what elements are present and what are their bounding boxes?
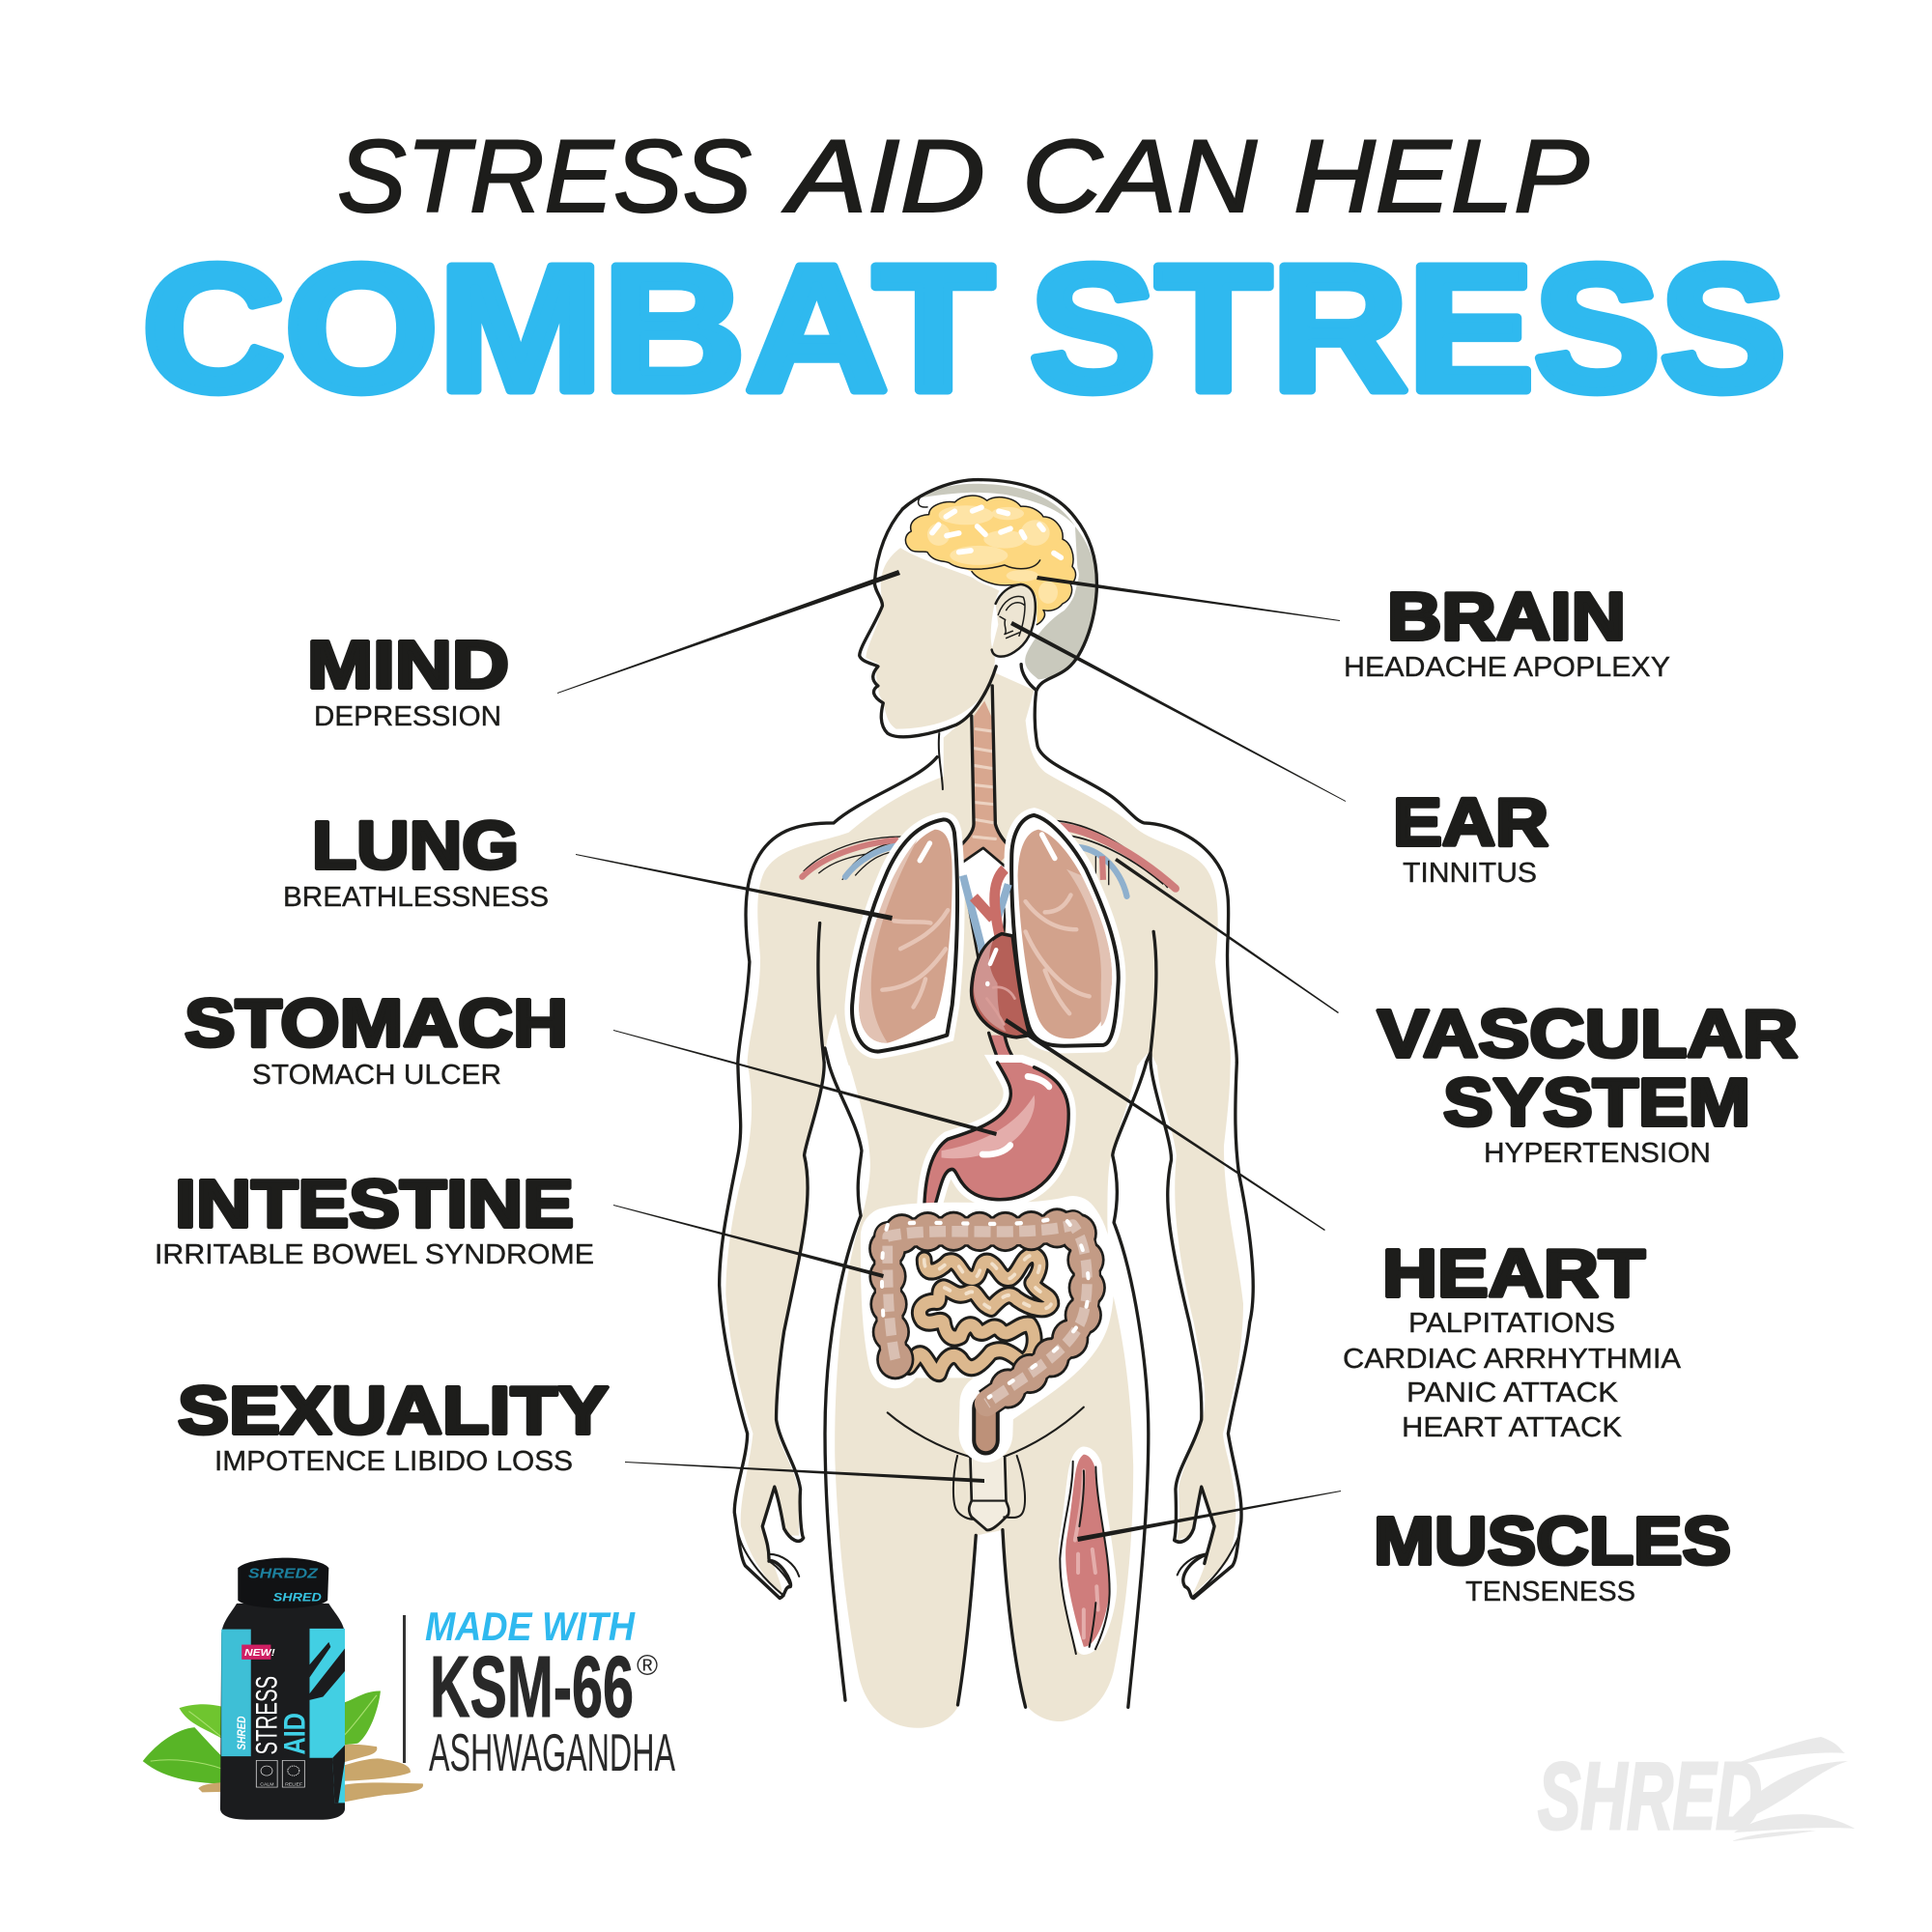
body figure: abdomen, arms and legs: [720, 1063, 1253, 1728]
leader line: intestine: [613, 1205, 884, 1278]
label: vascular system: [1378, 996, 1798, 1169]
label: ear: EAR: [1393, 784, 1548, 860]
leader line: vascular: [1115, 858, 1339, 1013]
registered mark: ®: [637, 1650, 658, 1682]
ksm-66: KSM-66: [430, 1639, 634, 1736]
relief icon: RELIEF: [285, 1782, 302, 1787]
new badge: [242, 1645, 275, 1660]
esophagus: [990, 1036, 1023, 1067]
label: sexuality: SEXUALITY: [178, 1373, 609, 1448]
shredz logo watermark: SHRED: [1538, 1743, 1762, 1849]
calm icon: [256, 1760, 277, 1787]
label: heart: HEART ATTACK: [1402, 1412, 1623, 1443]
label: heart: PALPITATIONS: [1408, 1308, 1615, 1339]
groin: [953, 1456, 1025, 1530]
label: sexuality: IMPOTENCE LIBIDO LOSS: [214, 1446, 573, 1477]
label: intestine: [155, 1166, 594, 1270]
icon: ashwagandha roots: [198, 1745, 423, 1803]
colon halo: [888, 1225, 1087, 1434]
icon: leaves: [143, 1690, 381, 1783]
label: lung: BREATHLESSNESS: [283, 882, 549, 913]
lungs: [852, 815, 1119, 1052]
label: muscles: [1374, 1503, 1731, 1607]
label: mind: DEPRESSION: [314, 701, 501, 732]
large intestine: [882, 1215, 1089, 1440]
label: lung: LUNG: [312, 808, 519, 883]
label: vascular system: HYPERTENSION: [1484, 1138, 1711, 1169]
label: lung: [283, 808, 549, 913]
title: stress aid can help: AID: [781, 118, 985, 234]
label: brain: HEADACHE APOPLEXY: [1344, 652, 1670, 683]
outline: head and shoulders: [902, 480, 1236, 1063]
product name aid: AID: [277, 1713, 311, 1754]
label: ear: [1393, 784, 1548, 889]
label: vascular system: SYSTEM: [1443, 1065, 1750, 1140]
leader line: heart: [1005, 1018, 1325, 1231]
leader line: ear: [1010, 621, 1346, 802]
ashwagandha: ASHWAGANDHA: [429, 1722, 675, 1782]
bottle label cyan left: [221, 1630, 251, 1756]
arteries and veins: [802, 820, 1176, 896]
shredz on label: SHRED: [236, 1716, 248, 1749]
torso and legs fill: [835, 1063, 1138, 1728]
label: vascular system: VASCULAR: [1378, 996, 1798, 1071]
bottle body: [220, 1604, 345, 1820]
label: heart: CARDIAC ARRHYTHMIA: [1343, 1344, 1682, 1375]
leg muscle: [1060, 1455, 1110, 1654]
label: stomach: STOMACH: [185, 985, 568, 1061]
product name: STRESS: [249, 1676, 284, 1754]
trachea: [958, 701, 1010, 865]
title: combat stress: STRESS: [1030, 229, 1786, 429]
label: intestine: IRRITABLE BOWEL SYNDROME: [155, 1239, 594, 1270]
label: mind: [307, 627, 509, 732]
left arm fill: [725, 1063, 824, 1596]
calm icon: CALM: [260, 1782, 274, 1787]
label: sexuality: [178, 1373, 609, 1477]
outlines: arms and torso: [825, 1063, 862, 1700]
label: brain: BRAIN: [1387, 579, 1626, 654]
divider: [403, 1615, 406, 1763]
right arm fill: [1157, 1063, 1243, 1596]
title: combat stress: [142, 229, 1786, 429]
product bottle with ashwagandha: [143, 1558, 423, 1820]
label: stomach: [185, 985, 568, 1091]
label: muscles: TENSENESS: [1465, 1577, 1635, 1607]
body figure: head, chest and organs: [738, 480, 1236, 1067]
back of head shading: [1025, 526, 1096, 679]
leader line: brain: [1037, 576, 1340, 621]
bottle cap: [238, 1558, 328, 1608]
bottle label cyan right: [309, 1629, 345, 1803]
small intestine: [896, 1238, 1068, 1378]
label: ear: TINNITUS: [1403, 858, 1537, 889]
label: heart: [1343, 1236, 1682, 1443]
title: stress aid can help: CAN: [1022, 118, 1258, 234]
blue and red great vessels: [963, 875, 1009, 953]
title: combat stress: COMBAT: [142, 229, 994, 429]
cap logo lower: SHRED: [273, 1590, 322, 1604]
leader line: muscles: [1077, 1491, 1341, 1542]
label: muscles: MUSCLES: [1374, 1503, 1731, 1578]
ear: [992, 584, 1036, 657]
face fill: [866, 548, 1000, 729]
label: mind: MIND: [307, 627, 509, 702]
label: heart: PANIC ATTACK: [1406, 1378, 1619, 1408]
new badge: NEW!: [244, 1648, 275, 1659]
relief icon: [282, 1760, 304, 1787]
pelvis lines: [888, 1407, 1084, 1457]
leader line: lung: [576, 854, 893, 921]
body fill upper: [748, 673, 1231, 1065]
bottle label stripes: [309, 1642, 345, 1803]
label: stomach: STOMACH ULCER: [252, 1060, 501, 1091]
title: stress aid can help: [337, 118, 1589, 234]
title: stress aid can help: STRESS: [337, 118, 752, 234]
label: intestine: INTESTINE: [175, 1166, 574, 1241]
title: stress aid can help: HELP: [1293, 118, 1589, 234]
brain: [901, 496, 1076, 657]
label: heart: HEART: [1382, 1236, 1645, 1311]
label: brain: [1344, 579, 1670, 683]
heart: [972, 934, 1030, 1037]
leader line: sexuality: [625, 1462, 984, 1483]
cap logo: SHREDZ: [248, 1566, 319, 1581]
made with: MADE WITH: [425, 1604, 636, 1649]
stomach: [924, 1063, 1068, 1218]
leader line: stomach: [613, 1030, 997, 1136]
leader line: mind: [557, 570, 900, 694]
